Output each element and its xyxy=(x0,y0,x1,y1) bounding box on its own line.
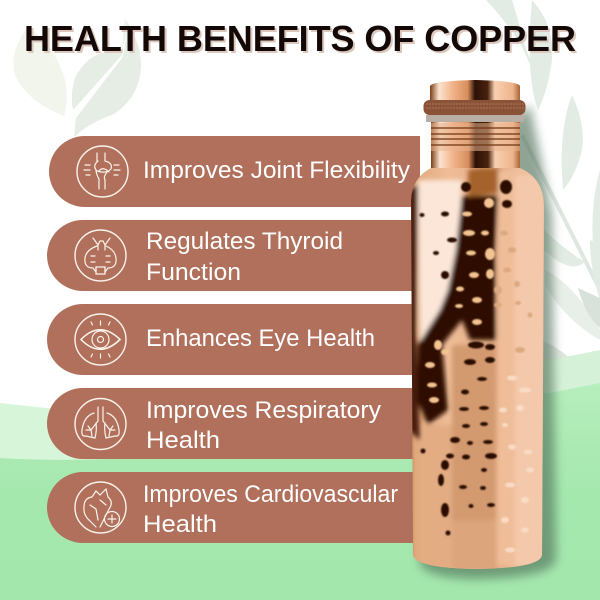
bottle neck xyxy=(431,122,520,170)
label: line 2: Health xyxy=(143,511,217,538)
label: line 1: Regulates Thyroid xyxy=(146,228,343,255)
bottle body xyxy=(411,168,544,569)
label: line 2: Health xyxy=(146,427,220,454)
icon: thyroid xyxy=(75,230,126,281)
background: green wave xyxy=(0,340,600,600)
dents: dark spots xyxy=(420,180,512,536)
bottle shadow xyxy=(420,105,556,579)
label: line 1: Improves Cardiovascular xyxy=(143,481,398,508)
panel: enhances eye health xyxy=(47,304,420,375)
icon: lungs xyxy=(75,398,126,450)
bottle cap xyxy=(430,80,520,100)
dents: light on dark xyxy=(425,198,495,403)
dents: pale spots xyxy=(499,376,534,552)
background: right leaves xyxy=(486,0,600,340)
label: Enhances Eye Health xyxy=(146,325,375,352)
label: line 2: Function xyxy=(146,259,241,286)
title: HEALTH BENEFITS OF COPPER xyxy=(26,20,578,61)
dents: peach spots xyxy=(494,230,532,353)
panel: regulates thyroid function xyxy=(47,220,420,291)
icon: knee joint xyxy=(77,146,128,197)
soft tone zones xyxy=(408,168,545,570)
copper bottle xyxy=(405,80,556,579)
panel: improves joint flexibility xyxy=(49,136,420,207)
panel: improves respiratory health xyxy=(47,388,420,459)
label: line 1: Improves Respiratory xyxy=(146,397,381,424)
background: left leaves xyxy=(13,17,141,137)
icon: eye xyxy=(75,314,126,365)
label: Improves Joint Flexibility xyxy=(143,157,410,184)
panel: improves cardiovascular health xyxy=(47,472,420,543)
title: HEALTH BENEFITS OF COPPER xyxy=(24,18,576,59)
icon: heart xyxy=(75,482,126,533)
